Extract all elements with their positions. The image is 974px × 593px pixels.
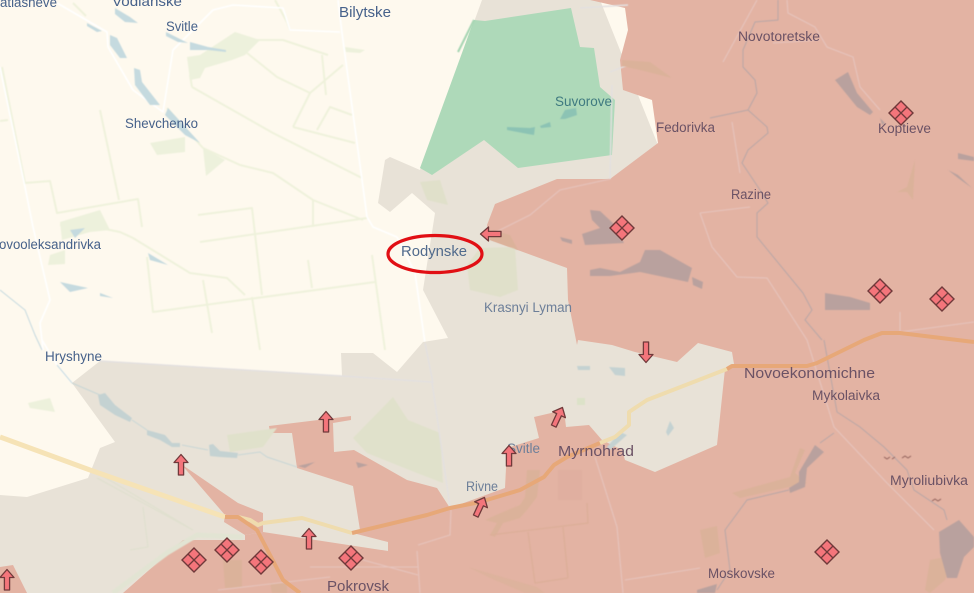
place labels: Fedorivka bbox=[656, 120, 715, 135]
place labels: Hryshyne bbox=[45, 349, 102, 364]
place labels: Novotoretske bbox=[738, 29, 820, 44]
callout: red ellipse around Rodynske bbox=[388, 236, 482, 272]
features in grey and green zones bbox=[72, 5, 674, 593]
icons: attack direction arrows bbox=[0, 227, 653, 590]
place labels: Novoekonomichne bbox=[744, 365, 875, 382]
place labels: Bilytske bbox=[339, 5, 391, 21]
road: highway through grey zone and occupied territory bbox=[0, 333, 974, 593]
place labels: Koptieve bbox=[878, 121, 931, 136]
place labels: Shevchenko bbox=[125, 116, 198, 131]
zone: contested grey territory bbox=[0, 0, 740, 593]
place labels: Krasnyi Lyman bbox=[484, 300, 572, 315]
place labels: Svitle bbox=[507, 441, 540, 456]
place labels: Rivne bbox=[466, 479, 498, 494]
base map features in unoccupied territory bbox=[0, 0, 425, 412]
place labels: Suvorove bbox=[555, 94, 612, 109]
label: Rodynske: Rodynske bbox=[401, 243, 467, 260]
place labels: ovooleksandrivka bbox=[0, 237, 101, 252]
features in occupied territory bbox=[218, 0, 974, 593]
place labels: Mykolaivka bbox=[812, 388, 880, 403]
place labels: Myroliubivka bbox=[890, 473, 969, 488]
place labels: Svitle bbox=[166, 19, 198, 34]
place labels: Myrnohrad bbox=[558, 443, 634, 460]
zone: liberated green territory bbox=[420, 8, 615, 175]
place labels: Razine bbox=[731, 187, 771, 202]
place labels: Moskovske bbox=[708, 566, 775, 581]
icons: fortification diamonds bbox=[182, 101, 954, 574]
